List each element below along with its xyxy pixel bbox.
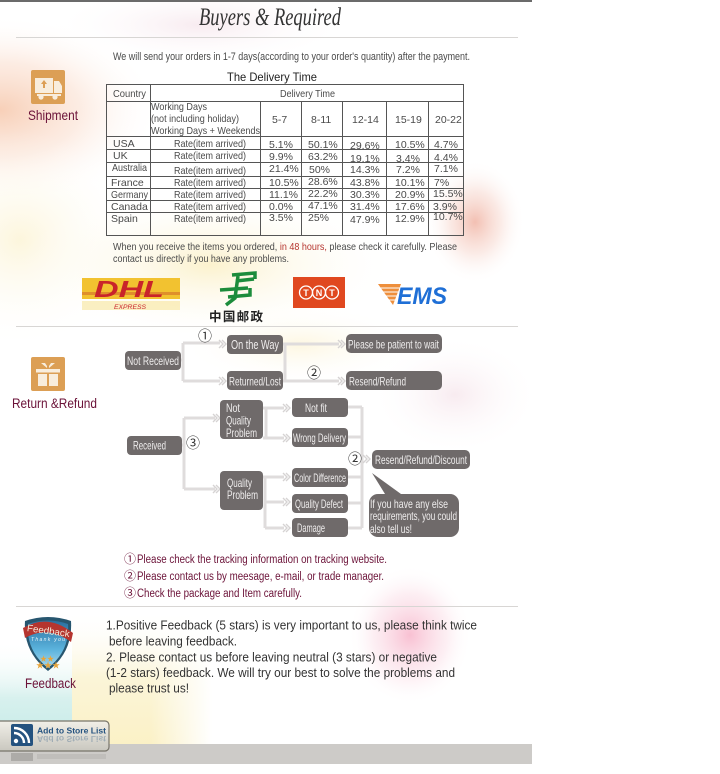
icon: truck	[31, 70, 65, 104]
row: Australia: 50%	[309, 164, 330, 176]
logo: TNT: N	[316, 288, 322, 298]
row: Germany: 22.2%	[308, 188, 338, 200]
row: USA: 10.5%	[395, 139, 425, 151]
table header: Delivery Time	[280, 88, 335, 100]
inspection notice: When you receive the items you ordered, in 48 hours, please check it carefully. Please	[113, 241, 457, 253]
row: France: 43.8%	[350, 177, 380, 189]
row: Spain: 25%	[308, 212, 329, 224]
logo: China Post: 中国邮政	[209, 309, 263, 324]
table heading: The Delivery Time	[227, 70, 317, 84]
table header: Working Days	[151, 101, 207, 113]
table header: (not including holiday)	[151, 113, 239, 125]
row: Germany: 11.1%	[269, 189, 298, 201]
flowchart: not received: On the Way	[231, 337, 279, 352]
row: UK: UK	[113, 150, 128, 162]
row: USA: 50.1%	[308, 139, 338, 151]
flowchart: not received: Resend/Refund	[349, 374, 406, 388]
badge: add to store list: Add to Store List	[37, 726, 106, 736]
label: return and refund: Return &Refund	[12, 396, 97, 411]
row: Canada: 47.1%	[308, 200, 338, 212]
flowchart: not received: Not Received	[127, 354, 179, 368]
row: USA: 5.1%	[269, 139, 293, 151]
divider: flow	[16, 606, 518, 607]
bottom grey band	[0, 744, 532, 764]
row: UK: 63.2%	[308, 151, 338, 163]
row: Germany	[111, 188, 463, 201]
logo: EMS: EMS	[397, 283, 447, 310]
row: UK: Rate(item arrived)	[174, 150, 246, 162]
icon: feedback shield: Feedback	[26, 623, 71, 640]
row: UK: 9.9%	[269, 151, 293, 163]
row: Spain: Rate(item arrived)	[174, 213, 246, 225]
flow notes: ③	[124, 586, 136, 600]
flowchart: received: Not fit	[305, 401, 327, 415]
row: UK	[113, 150, 458, 165]
flowchart: received: Quality	[227, 476, 252, 490]
icon: gift	[31, 357, 65, 391]
row: Australia: Rate(item arrived)	[174, 165, 246, 177]
row: Germany: Germany	[111, 189, 149, 201]
feedback text: (1-2 stars) feedback. We will try our best to solve the problems and	[106, 665, 455, 680]
flowchart: received: requirements, you could	[370, 509, 457, 523]
badge: add to store list: Add to Store List	[37, 734, 106, 743]
table header: 20-22	[435, 114, 462, 126]
row: Canada: 3.9%	[433, 201, 457, 213]
row: France: 28.6%	[308, 176, 338, 188]
row: Spain: Spain	[111, 213, 138, 225]
row: Australia	[112, 162, 458, 177]
table header: 12-14	[352, 114, 379, 126]
flowchart: received: Quality	[226, 414, 251, 428]
logo: DHL: EXPRESS	[114, 304, 147, 311]
flow notes: Check the package and Item carefully.	[137, 588, 302, 600]
row: France: 10.1%	[395, 177, 425, 189]
row: UK: 19.1%	[350, 153, 380, 165]
row: Germany: 20.9%	[395, 189, 425, 201]
flowchart: not received: Please be patient to wait	[348, 338, 439, 352]
flow notes: Please check the tracking information on tracking website.	[137, 554, 387, 566]
flowchart: received: Damage	[297, 521, 325, 535]
panel: feedback	[23, 617, 477, 696]
feedback text: please trust us!	[109, 680, 189, 696]
flowchart: received: Received	[133, 438, 166, 452]
row: Canada: 0.0%	[269, 201, 293, 213]
row: Australia: 7.1%	[434, 163, 458, 175]
panel: return and refund	[12, 328, 470, 600]
icon: feedback shield: ★★★	[36, 661, 60, 670]
row: USA: USA	[113, 138, 135, 150]
row: Spain	[111, 211, 463, 226]
row: Spain: 10.7%	[433, 211, 463, 223]
label: shipment: Shipment	[28, 107, 78, 123]
flowchart: not received: ①	[198, 328, 212, 344]
feedback text	[106, 618, 477, 696]
table header: 5-7	[272, 114, 287, 126]
row: USA: 29.6%	[350, 140, 380, 152]
divider: title	[16, 37, 518, 38]
badge: add to store list	[0, 721, 109, 761]
row: Germany: 30.3%	[350, 189, 380, 201]
flowchart: received: Problem	[226, 426, 257, 440]
flowchart: received: Quality Defect	[295, 497, 343, 511]
table header: 8-11	[311, 114, 331, 126]
flowchart: received: Problem	[227, 488, 258, 502]
flowchart: not received: ②	[307, 365, 321, 381]
feedback text: 2. Please contact us before leaving neutral (3 stars) or negative	[106, 650, 437, 664]
delivery time table	[106, 84, 464, 236]
flowchart: received	[127, 398, 470, 537]
icon: rss	[11, 724, 33, 746]
table header: 15-19	[395, 114, 422, 126]
flowchart: received: Not	[226, 401, 240, 415]
row: Spain: 12.9%	[395, 213, 425, 225]
flow notes: ①	[124, 552, 136, 566]
logo: DHL: DHL	[94, 276, 164, 302]
row: USA: 4.7%	[434, 139, 458, 151]
row: Australia: Australia	[112, 162, 147, 174]
logo: China Post	[209, 273, 263, 324]
table header	[113, 88, 462, 137]
row: Spain: 3.5%	[269, 212, 293, 224]
row: Canada: Rate(item arrived)	[174, 201, 246, 213]
label: feedback: Feedback	[25, 676, 76, 691]
flowchart: received: Wrong Delivery	[293, 431, 346, 445]
row: Australia: 14.3%	[350, 164, 380, 176]
row: UK: 4.4%	[434, 152, 458, 164]
inspection notice: contact us directly if you have any problems.	[113, 253, 289, 265]
row: France	[111, 176, 449, 189]
row: Canada: 17.6%	[395, 201, 425, 213]
row: USA: Rate(item arrived)	[174, 138, 246, 150]
row: Australia: 21.4%	[269, 163, 299, 175]
flowchart: received: ②	[348, 451, 362, 467]
divider: logos	[16, 326, 518, 327]
logo: TNT: T	[329, 288, 335, 298]
row: Canada: 31.4%	[350, 201, 380, 213]
logo: DHL	[82, 276, 180, 311]
row: Australia: 7.2%	[396, 164, 420, 176]
row: Canada	[111, 200, 457, 213]
flowchart: received: Color Difference	[294, 471, 346, 485]
table header: Country	[113, 88, 147, 100]
flowchart: not received: Returned/Lost	[229, 374, 281, 388]
flowchart: received: ③	[186, 435, 200, 451]
send notice: We will send your orders in 1-7 days(according to your order's quantity) after the payment.	[113, 51, 470, 63]
row: France: France	[111, 177, 144, 189]
logo: TNT: T	[303, 288, 309, 298]
row: France: Rate(item arrived)	[174, 177, 246, 189]
top dark rule	[0, 0, 532, 2]
feedback text: before leaving feedback.	[109, 634, 237, 648]
title: Buyers & Required	[199, 4, 341, 31]
flowchart: received: Resend/Refund/Discount	[375, 453, 467, 467]
row: USA	[113, 138, 458, 152]
flowchart: not received	[125, 328, 442, 390]
logo: TNT	[293, 277, 345, 308]
row: France: 7%	[434, 177, 449, 189]
icon: feedback shield	[23, 617, 73, 671]
flow notes: ②	[124, 569, 136, 583]
flowchart: received: If you have any else	[370, 497, 448, 511]
row: Spain: 47.9%	[350, 214, 380, 226]
flowchart: received: also tell us!	[370, 522, 412, 536]
flow notes: Please contact us by meesage, e-mail, or trade manager.	[137, 571, 384, 583]
panel: shipment	[28, 51, 470, 265]
row: Germany: Rate(item arrived)	[174, 189, 246, 201]
row: France: 10.5%	[269, 177, 299, 189]
table header: Working Days + Weekends	[151, 125, 260, 137]
row: Germany: 15.5%	[433, 188, 463, 200]
carrier logos	[82, 273, 447, 324]
flow notes	[124, 552, 387, 600]
row: Canada: Canada	[111, 201, 148, 213]
pastel background	[0, 0, 540, 745]
feedback text: 1.Positive Feedback (5 stars) is very important to us, please think twice	[106, 618, 477, 632]
row: UK: 3.4%	[396, 153, 420, 165]
icon: feedback shield: ★★	[40, 655, 54, 663]
inspection notice	[113, 241, 457, 265]
icon: feedback shield: Thank you	[31, 637, 65, 643]
